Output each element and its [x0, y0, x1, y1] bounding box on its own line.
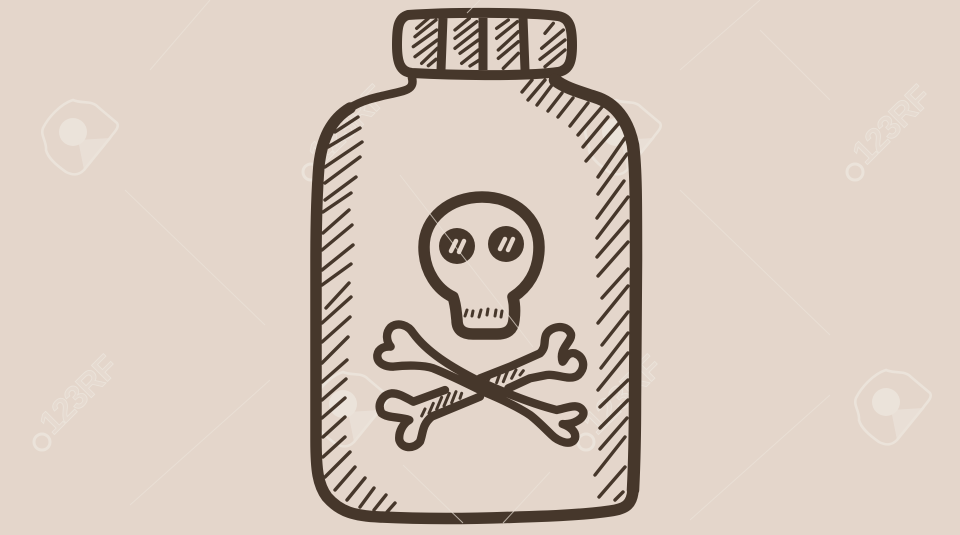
watermark: logos and text behind jar	[301, 78, 668, 450]
bone front	[377, 325, 583, 443]
watermark grid lines	[125, 0, 830, 523]
watermark logo jar bottom left, under	[312, 372, 388, 446]
jar hatching right	[522, 80, 628, 500]
skull eye right	[488, 226, 524, 262]
bone shading	[422, 370, 523, 416]
jar hatching left	[322, 117, 395, 512]
watermark logo bottom right	[855, 370, 931, 444]
cap ribs	[441, 18, 525, 70]
bone back	[380, 327, 583, 447]
123RF mark bottom left: 123RF	[32, 348, 124, 441]
skull	[424, 197, 539, 334]
jar body outline	[316, 78, 636, 518]
123RF mark top right: 123RF	[845, 78, 937, 171]
icon: poison jar	[316, 13, 636, 518]
watermark: outer logos and text	[32, 78, 937, 450]
crossbones	[377, 325, 583, 447]
watermark logo top left	[42, 100, 118, 174]
cap hatching	[413, 18, 565, 68]
jar cap	[397, 13, 572, 75]
skull eye left	[439, 228, 475, 264]
skull teeth	[465, 309, 502, 317]
watermark logo jar top right, under	[585, 100, 661, 174]
123RF mark jar bottom right, under: 123RF	[576, 348, 668, 441]
123RF mark jar top left, under: 123RF	[301, 78, 393, 171]
